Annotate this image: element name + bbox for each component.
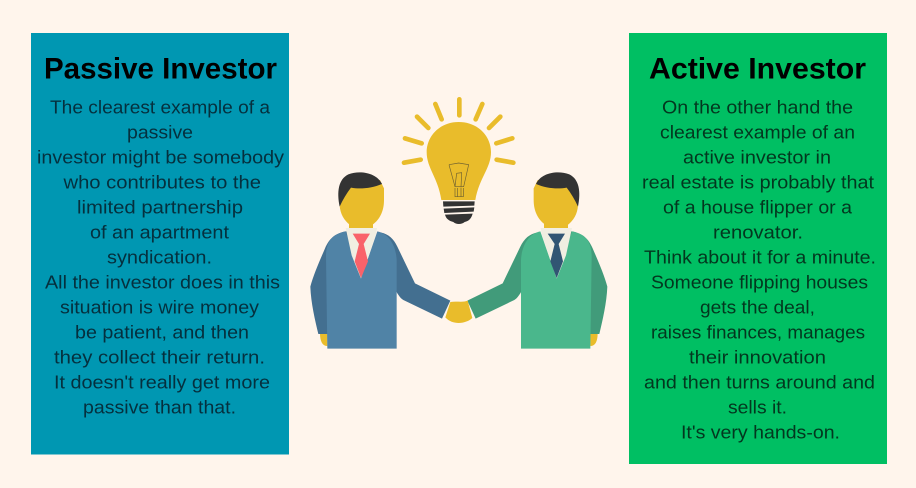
right neck [544,218,568,232]
text block: passive investor description: passive than that. [83,398,236,418]
text block: passive investor description: passive [127,122,193,142]
figure: left investor in blue suit [310,172,450,349]
left suit body [326,231,397,349]
text block: passive investor description: investor might be somebody [37,148,284,168]
text block: passive investor description: of an apartment [90,222,229,242]
bulb filament [449,163,469,197]
left tie [353,234,370,278]
text block: passive investor description: situation is wire money [60,298,259,318]
text block: active investor description: sells it. [728,398,787,418]
text block: active investor description: their innovation [689,348,826,368]
right extended arm [467,232,538,319]
panel: passive investor [31,33,289,454]
right hair [536,172,579,207]
illustration: handshake and light bulb [310,99,607,349]
figure: right investor in green suit [467,172,607,349]
right suit body [521,231,592,349]
text block: active investor description: gets the deal, [700,298,815,318]
left back arm and sleeve [310,231,367,334]
left neck [349,218,373,232]
text block: active investor description: of a house flipper or a [663,198,853,218]
text block: active investor description: Think about it for a minute. [644,248,876,268]
text block: active investor description: Someone flipping houses [651,272,868,292]
text block: active investor description: renovator. [713,222,803,242]
text block: passive investor description: syndication. [107,248,212,268]
text block: passive investor description [37,98,284,418]
bulb glass [427,122,491,200]
text block: active investor description: clearest example of an [660,122,855,142]
text block: passive investor description: be patient, and then [75,322,249,342]
text block: active investor description: It's very hands-on. [681,422,840,442]
right tie [548,234,565,278]
icon: clasped hands [445,301,472,323]
text block: active investor description: real estate is probably that [642,172,874,192]
icon: light bulb [404,99,513,224]
text block: passive investor description: they collect their return. [54,348,265,368]
right hand [590,333,598,346]
left shirt collar [346,228,377,279]
right back arm and sleeve [551,231,607,334]
heading: passive investor: Passive Investor [44,52,278,86]
text block: active investor description: and then turns around and [644,372,875,392]
panel: active investor [629,33,887,464]
left hair [338,172,382,207]
text block: active investor description: active investor in [683,148,831,168]
text block: active investor description [642,98,876,442]
heading: active investor: Active Investor [649,52,867,86]
left hand [320,333,327,346]
text block: passive investor description: limited partnership [77,198,243,218]
left head [340,178,384,225]
bulb base [443,201,475,224]
bulb rays [404,99,513,163]
text block: active investor description: raises finances, manages [651,322,865,342]
text block: passive investor description: It doesn't really get more [54,372,270,392]
right shirt collar [541,228,572,279]
text block: passive investor description: The clearest example of a [50,98,271,118]
text block: active investor description: On the other hand the [662,98,853,118]
text block: passive investor description: All the investor does in this [45,272,280,292]
left extended arm [380,232,450,319]
text block: passive investor description: who contributes to the [62,172,261,192]
right head [534,178,578,225]
